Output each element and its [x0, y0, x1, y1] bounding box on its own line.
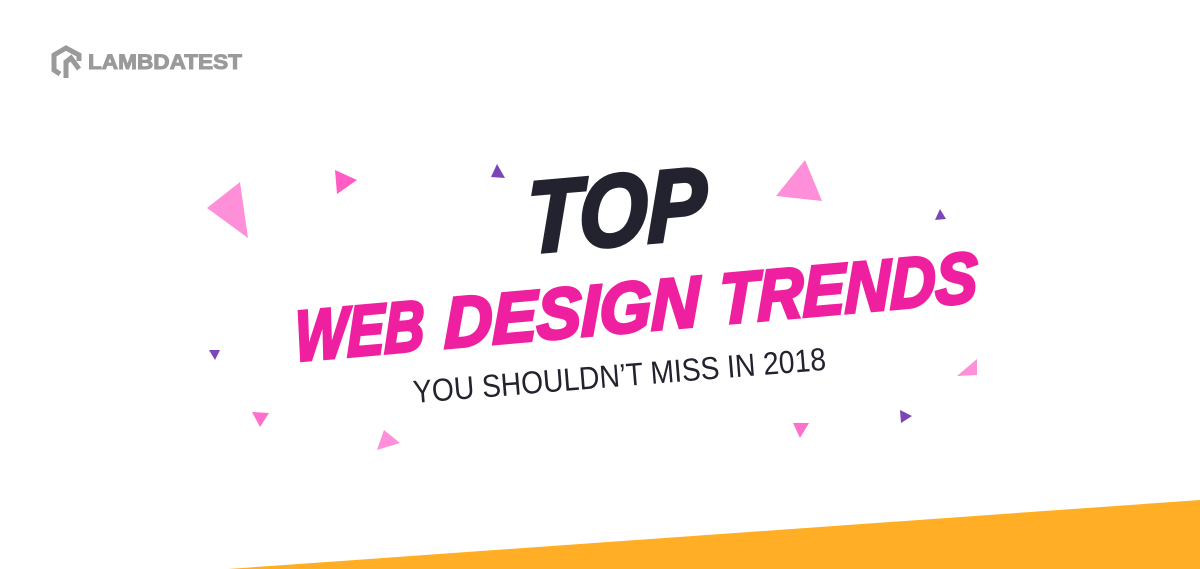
icon: logo hexagon	[54, 48, 79, 78]
logo wordmark: LAMBDATEST	[88, 50, 242, 74]
title: WEB DESIGN TRENDS	[295, 238, 977, 377]
triangle: pink right	[957, 359, 977, 376]
triangle: pink bottom	[377, 430, 400, 450]
triangle: large pink left	[207, 182, 248, 238]
triangle: hot pink lower left	[252, 412, 269, 427]
subtitle: YOU SHOULDN’T MISS IN 2018	[412, 341, 827, 410]
word: TRENDS: TRENDS	[719, 238, 977, 340]
triangle: purple right	[935, 209, 946, 220]
word: WEB: WEB	[295, 287, 425, 377]
triangle: purple top	[491, 164, 505, 178]
triangle: hot pink top	[335, 170, 357, 194]
logo: LambdaTest	[54, 48, 242, 78]
decorative triangles	[207, 160, 977, 450]
title: TOP: TOP	[527, 146, 707, 275]
triangle: hot pink lower right	[793, 423, 809, 438]
orange corner band	[228, 500, 1200, 569]
triangle: purple left	[209, 350, 220, 360]
word: DESIGN: DESIGN	[444, 262, 701, 364]
triangle: large pink right	[776, 160, 822, 201]
triangle: purple lower right	[900, 410, 912, 423]
